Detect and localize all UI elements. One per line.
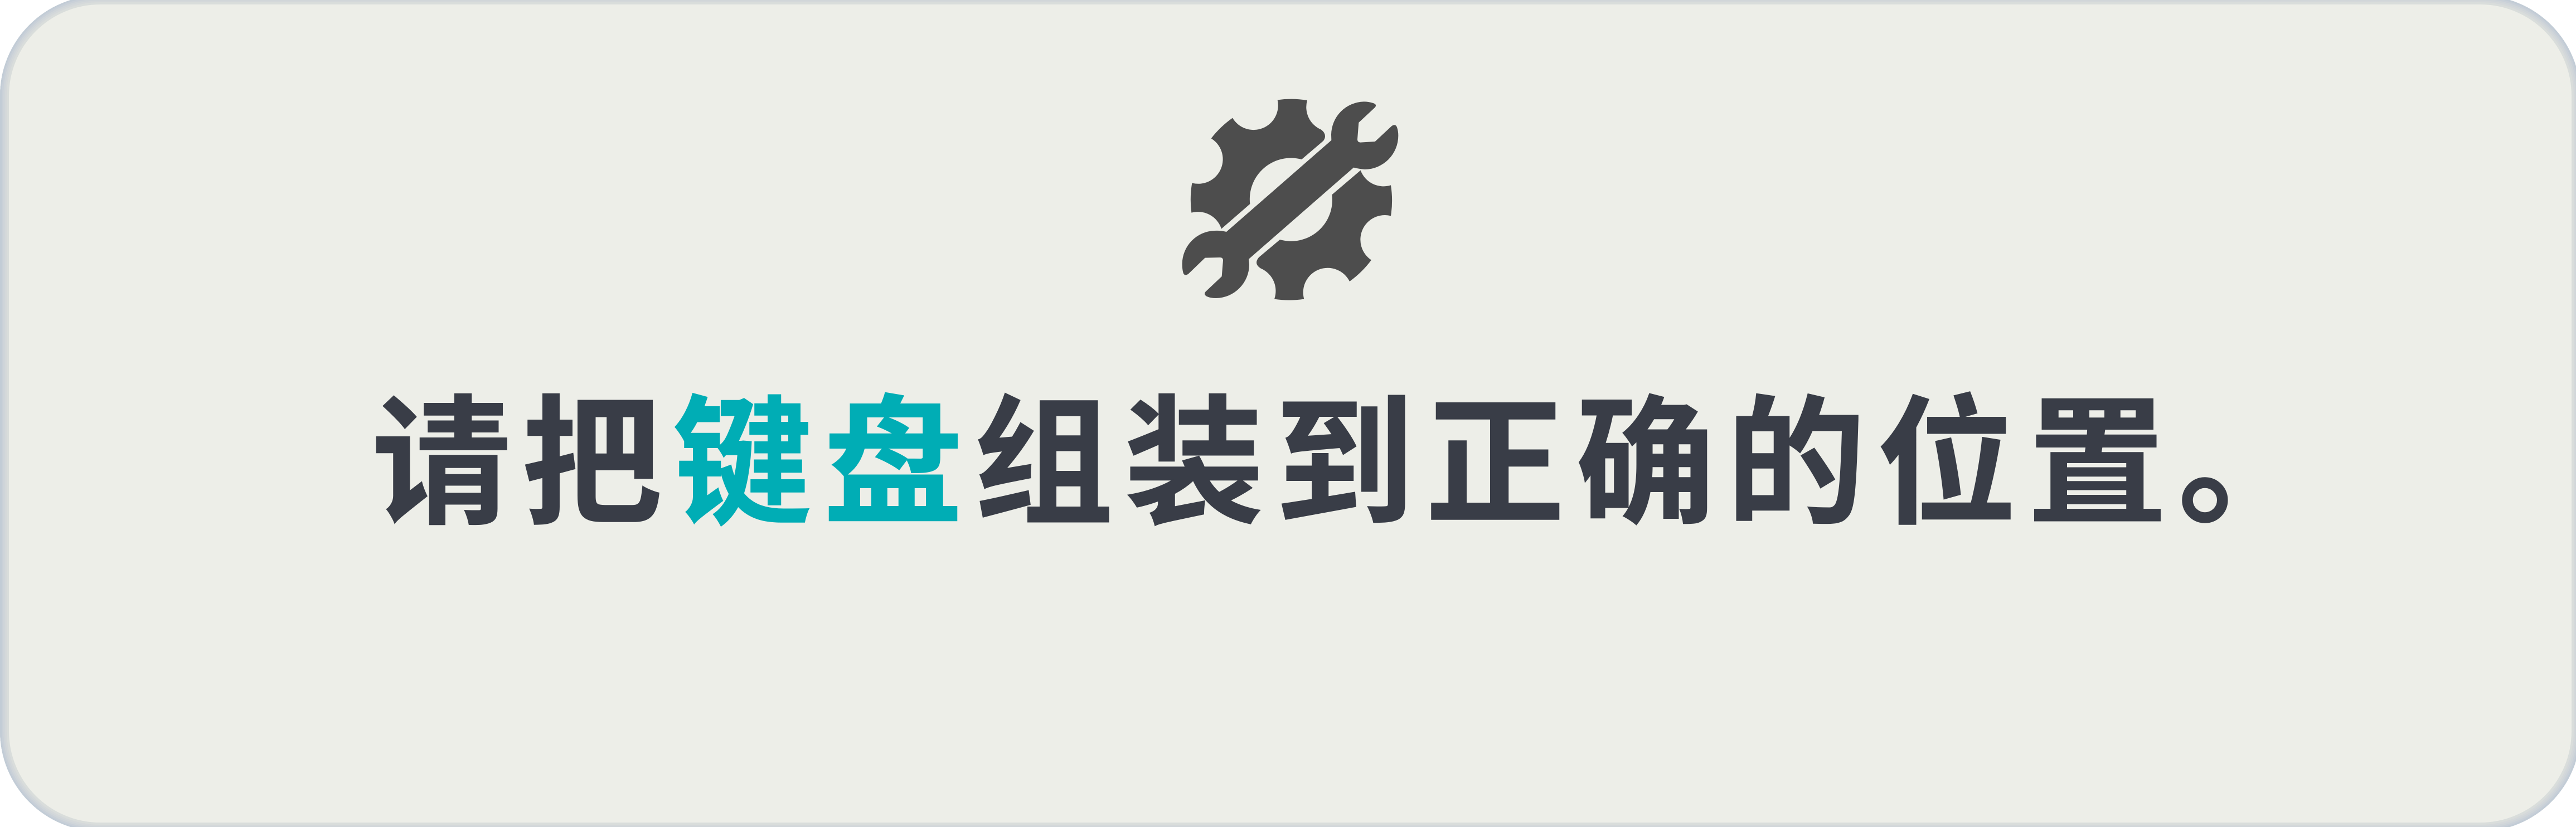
icon: gears and wrench (1182, 99, 1398, 300)
title: 请把键盘组装到正确的位置。 (372, 386, 2328, 542)
